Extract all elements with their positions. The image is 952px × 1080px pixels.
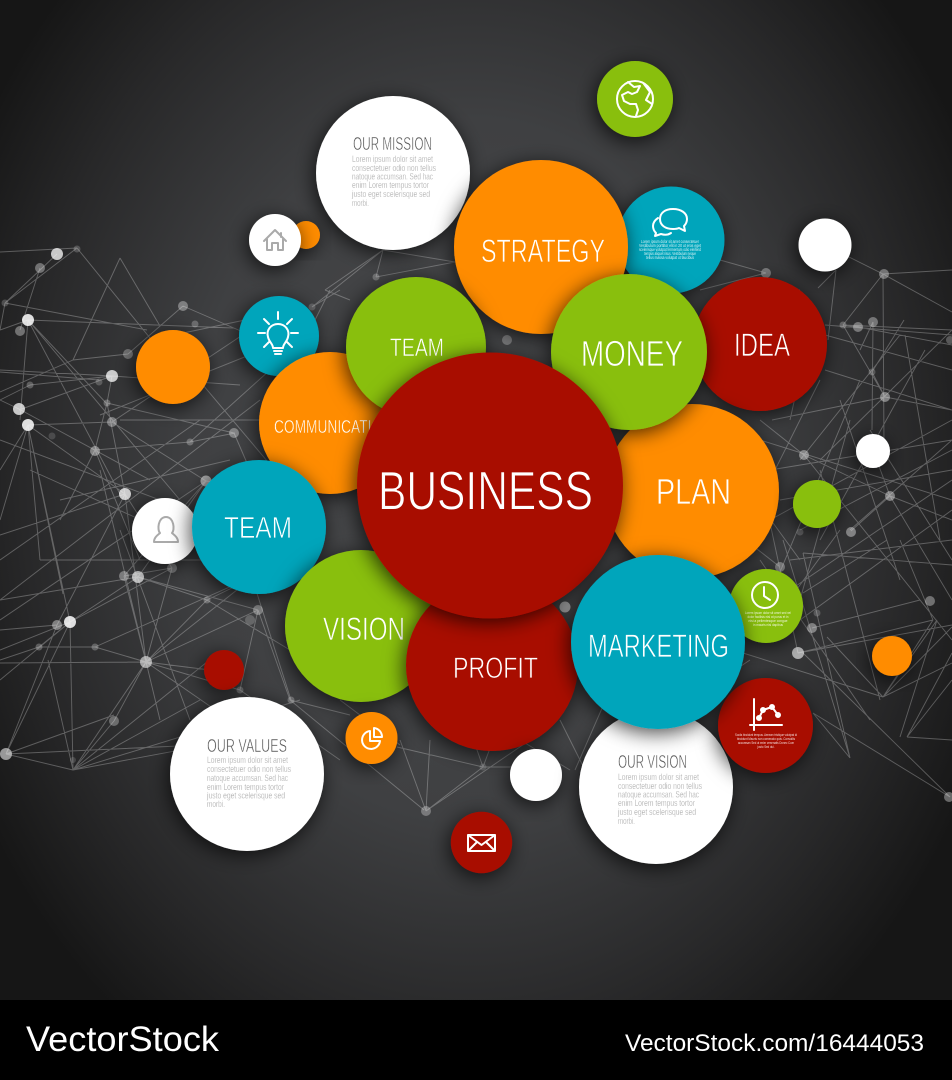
icon: clock (752, 582, 778, 608)
text block: clock body (745, 611, 791, 627)
circle: chat text (618, 186, 724, 294)
text block: clock body: dolor facilisis nisl at purus et in (748, 615, 788, 619)
circle: strategy (454, 160, 628, 334)
text block: mission body: consectetuer odio non tellus (352, 163, 436, 173)
circle: team green (346, 277, 486, 417)
text block: chart body: tincidunt Mauris non commodo quis. Convallis (737, 737, 795, 741)
label: plan: PLAN (656, 471, 731, 512)
text block: clock body: Lorem ipsum dolor sit amet sed vel (745, 611, 791, 615)
heading: our values: OUR VALUES (207, 736, 287, 756)
circle: small orange (292, 221, 320, 249)
text block: values body: natoque accumsan. Sed hac (207, 773, 288, 783)
circle: pie icon (346, 712, 398, 764)
text block: values body: consectetuer odio non tellus (207, 764, 291, 774)
text block: values body (206, 755, 291, 809)
text block: clock body: nisi a pellentesque congue (748, 619, 788, 623)
icon: globe (617, 81, 653, 117)
text block: vision body: justo eget scelerisque sed (617, 807, 696, 817)
circle: red blank small (204, 650, 244, 690)
label: team: TEAM (224, 510, 292, 545)
label: team: TEAM (390, 334, 444, 362)
circle: our vision (579, 710, 733, 864)
label: business: BUSINESS (378, 460, 593, 522)
circle: team teal (192, 460, 326, 594)
network mesh: lines and nodes (0, 245, 952, 816)
circle: person icon (132, 498, 198, 564)
text block: values body: justo eget scelerisque sed (206, 790, 285, 800)
footer bar (0, 1000, 952, 1080)
icon: envelope (468, 835, 495, 851)
text block: chart body (735, 733, 797, 749)
text block: mission body: Lorem ipsum dolor sit amet (352, 154, 433, 164)
circle: profit (406, 579, 578, 751)
text block: chart body: accumsan Sed ut enim venenatis Donec Cum (738, 741, 794, 745)
text block: chat body (639, 239, 702, 260)
heading: our vision: OUR VISION (618, 752, 687, 772)
text block: values body: Lorem ipsum dolor sit amet (207, 755, 288, 765)
icon: light bulb (258, 312, 298, 354)
text block: chat body: Vestibulum porttitor elit in 20 ut eros eget (639, 243, 702, 248)
text block: mission body: justo eget scelerisque sed (351, 189, 430, 199)
icon: house (264, 230, 286, 250)
circle: orange blank left (136, 330, 210, 404)
circle: white blank bottom (510, 749, 562, 801)
label: idea: IDEA (734, 327, 790, 363)
circle: orange blank right (872, 636, 912, 676)
circle: mail icon (451, 812, 512, 873)
icon: line chart (750, 699, 782, 730)
text block: chart body: Sociis tincidunt tempus. Aenean tristique volutpat id (735, 733, 797, 737)
circle: green blank (793, 480, 841, 528)
circle: globe icon (597, 61, 673, 137)
text block: mission body (351, 154, 436, 208)
text block: vision body (617, 772, 702, 826)
circle: communication (259, 352, 401, 494)
footer brand: VectorStock (26, 1020, 220, 1059)
circle: chart icon (718, 678, 813, 773)
text block: chat body: tellus massa volutpat ut faucibus (646, 255, 695, 260)
text block: vision body: enim Lorem tempus tortor (618, 798, 695, 808)
circle: plan (605, 404, 779, 578)
circle: idea bulb (239, 296, 319, 376)
circle: money (551, 274, 707, 430)
text block: values body: enim Lorem tempus tortor (207, 782, 284, 792)
circle: our mission (316, 96, 470, 250)
text block: vision body: natoque accumsan. Sed hac (618, 790, 699, 800)
icon: pie chart (362, 728, 382, 749)
circle: idea (693, 277, 827, 411)
circle: white blank (856, 434, 890, 468)
text block: mission body: enim Lorem tempus tortor (352, 180, 429, 190)
text block: vision body: Lorem ipsum dolor sit amet (618, 772, 699, 782)
circle: white blank right (798, 218, 852, 272)
label: vision: VISION (323, 611, 405, 647)
text block: values body: morbi. (207, 799, 225, 809)
label: money: MONEY (581, 333, 683, 374)
label: marketing: MARKETING (588, 628, 729, 664)
label: profit: PROFIT (453, 652, 538, 685)
text block: vision body: morbi. (618, 816, 635, 826)
text block: chat body: tempus aliquet risus. Vestibulum neque (644, 251, 696, 256)
circle: marketing (571, 555, 745, 729)
text block: clock body: in mauris nisi dapibus (753, 623, 783, 627)
heading: our mission: OUR MISSION (353, 134, 432, 154)
text block: mission body: morbi. (352, 198, 369, 208)
text block: chat body: scelerisque volutpat fermentum odio eleifend (639, 247, 701, 252)
circle: vision (285, 550, 437, 702)
text block: mission body: natoque accumsan. Sed hac (352, 172, 433, 182)
icon: speech bubbles (653, 209, 687, 236)
text block: chart body: justo Sed dui. (757, 745, 774, 749)
circle: clock (729, 569, 803, 643)
text block: chat body: Lorem ipsum dolor sit amet consectetuer (641, 239, 699, 244)
icon: person (154, 517, 178, 542)
label: strategy: STRATEGY (481, 233, 605, 269)
footer url: VectorStock.com/16444053 (625, 1030, 924, 1057)
circle: our values (170, 697, 324, 851)
label: communication: COMMUNICATION (274, 417, 392, 437)
circle: business (main) (357, 352, 623, 618)
text block: vision body: consectetuer odio non tellus (618, 781, 702, 791)
circle: home icon (249, 214, 301, 266)
